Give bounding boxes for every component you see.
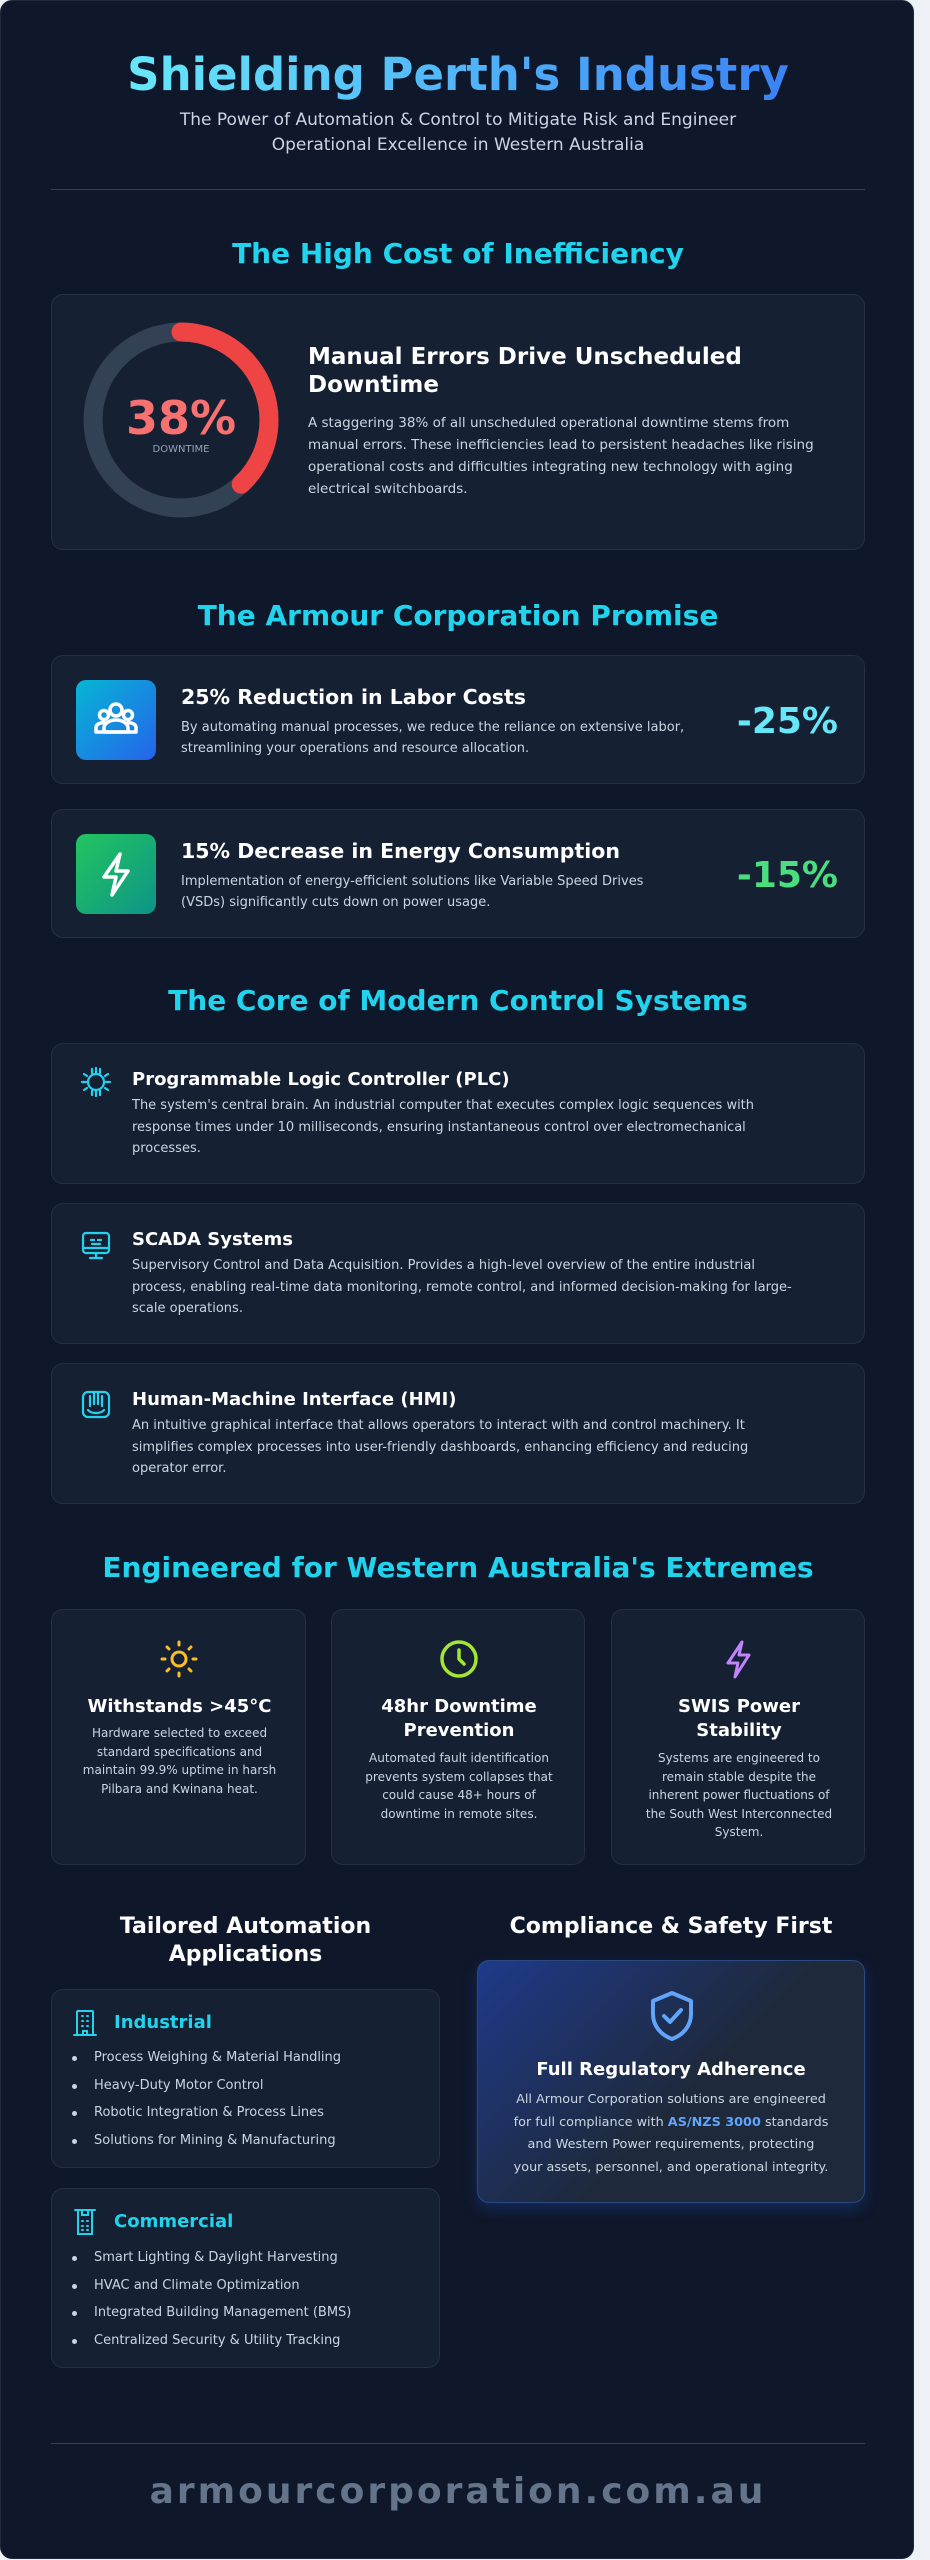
icon: clock [440, 1640, 478, 1678]
heading: labor: 25% Reduction in Labor Costs [181, 685, 526, 709]
stat: -15%: -15% [737, 855, 838, 896]
stat: -25%: -25% [737, 701, 838, 742]
text: 48hr: Automated fault identification prevents system collapses that could cause 48+ hours of downtime in remote sites. [365, 1751, 553, 1820]
icon: people [76, 680, 156, 760]
heading: SCADA: SCADA Systems [132, 1229, 293, 1250]
icon: tower [74, 2209, 96, 2235]
heading: tailored: Tailored Automation Applications [120, 1914, 371, 1967]
panel: SCADA [51, 1203, 865, 1344]
heading: extremes: Engineered for Western Australia's Extremes [102, 1551, 814, 1584]
text: compliance: your assets, personnel, and operational integrity. [514, 2160, 828, 2174]
donut chart [84, 322, 278, 518]
heading: industrial: Industrial [114, 2012, 212, 2033]
heading: heat: Withstands >45°C [88, 1696, 271, 1717]
icon: building [73, 2010, 97, 2036]
list: commercial: Integrated Building Management (BMS) [94, 2305, 351, 2320]
text: compliance: for full compliance with AS/NZS 3000 standards [514, 2114, 828, 2130]
list: industrial: Heavy-Duty Motor Control [94, 2078, 263, 2092]
heading: SWIS: SWIS Power Stability [678, 1696, 800, 1741]
subtitle: Operational Excellence in Western Australia [272, 135, 644, 155]
heading: commercial: Commercial [114, 2211, 233, 2232]
heading: compliance: Compliance & Safety First [510, 1914, 832, 1939]
heading: 48hr: 48hr Downtime Prevention [381, 1696, 537, 1741]
donut chart: 38% [126, 391, 236, 445]
list: industrial: Robotic Integration & Process Lines [94, 2105, 324, 2120]
text: compliance: and Western Power requirements, protecting [528, 2137, 814, 2152]
text: SCADA: process, enabling real-time data monitoring, remote control, and informed decision-making for large- [132, 1280, 792, 1294]
icon: bolt [726, 1640, 751, 1678]
heading: manual errors: Manual Errors Drive Unscheduled Downtime [308, 344, 742, 398]
donut chart: DOWNTIME [153, 444, 209, 455]
heading: high cost: The High Cost of Inefficiency [232, 237, 684, 270]
panel: commercial [51, 2188, 440, 2368]
text: PLC: response times under 10 milliseconds, ensuring instantaneous control over electromechanical [132, 1120, 746, 1134]
text: labor [181, 720, 684, 756]
panel: HMI [51, 1363, 865, 1504]
list: industrial [72, 2050, 341, 2148]
text: SCADA: scale operations. [132, 1301, 243, 1316]
icon: bolt [76, 834, 156, 914]
text: SCADA: Supervisory Control and Data Acquisition. Provides a high-level overview of the entire industrial [132, 1258, 755, 1273]
list: commercial: HVAC and Climate Optimization [94, 2278, 300, 2292]
heading: energy: 15% Decrease in Energy Consumption [181, 839, 620, 863]
icon: sun [160, 1640, 198, 1678]
panel: downtime [51, 294, 865, 550]
text: HMI: operator error. [132, 1461, 226, 1476]
text: SCADA [132, 1258, 792, 1316]
text: labor: streamlining your operations and resource allocation. [181, 741, 529, 756]
heading: core: The Core of Modern Control Systems [168, 984, 748, 1017]
icon: shield [651, 1991, 693, 2041]
text: PLC: The system's central brain. An industrial computer that executes complex logic sequences with [132, 1098, 754, 1113]
panel: industrial [51, 1989, 440, 2168]
list: industrial: Process Weighing & Material Handling [94, 2050, 341, 2065]
panel: SWIS [611, 1609, 865, 1865]
text: HMI: An intuitive graphical interface that allows operators to interact with and control machinery. It [132, 1418, 745, 1433]
icon: monitor [82, 1232, 110, 1260]
heading: promise: The Armour Corporation Promise [198, 599, 718, 632]
text: SWIS: Systems are engineered to remain stable despite the inherent power fluctuations of the South West Interconnected System. [646, 1751, 832, 1839]
list: commercial: Smart Lighting & Daylight Harvesting [94, 2250, 338, 2265]
panel: compliance [477, 1960, 865, 2203]
icon: hand [82, 1390, 110, 1418]
list: industrial: Solutions for Mining & Manufacturing [94, 2132, 336, 2148]
text: energy [181, 874, 643, 910]
text: energy: (VSDs) significantly cuts down on power usage. [181, 895, 490, 910]
text: energy: Implementation of energy-efficient solutions like Variable Speed Drives [181, 874, 643, 889]
heading: full adherence: Full Regulatory Adherence [536, 2059, 806, 2080]
subtitle: The Power of Automation & Control to Mitigate Risk and Engineer [180, 110, 736, 130]
list: commercial [72, 2250, 351, 2348]
title: Shielding Perth's Industry [127, 48, 789, 101]
text: PLC: processes. [132, 1141, 201, 1156]
text: HMI: simplifies complex processes into user-friendly dashboards, enhancing efficiency and reducing [132, 1440, 748, 1454]
panel: downtime prevention [331, 1609, 585, 1865]
text: labor: By automating manual processes, we reduce the reliance on extensive labor, [181, 720, 684, 735]
heading: PLC: Programmable Logic Controller (PLC) [132, 1069, 510, 1090]
panel: PLC [51, 1043, 865, 1184]
text: compliance: All Armour Corporation solutions are engineered [516, 2092, 826, 2107]
list: commercial: Centralized Security & Utility Tracking [94, 2332, 340, 2348]
icon: chip [80, 1066, 112, 1098]
subtitle [180, 110, 736, 155]
text: heat: Hardware selected to exceed standard specifications and maintain 99.9% uptime in harsh Pilbara and Kwinana heat. [83, 1726, 276, 1796]
heading: HMI: Human-Machine Interface (HMI) [132, 1389, 457, 1410]
footer: website: armourcorporation.com.au [150, 2471, 766, 2512]
panel: heat [51, 1609, 306, 1865]
text: manual errors: A staggering 38% of all unscheduled operational downtime stems from manual errors. These inefficiencies lead to persistent headaches like rising operational costs and difficulties integrating new technology with aging electrical switchboards. [308, 415, 814, 497]
panel: labor [51, 655, 865, 784]
panel: energy [51, 809, 865, 938]
text: HMI [132, 1418, 748, 1476]
text: compliance [514, 2092, 828, 2174]
text: PLC [132, 1098, 754, 1156]
